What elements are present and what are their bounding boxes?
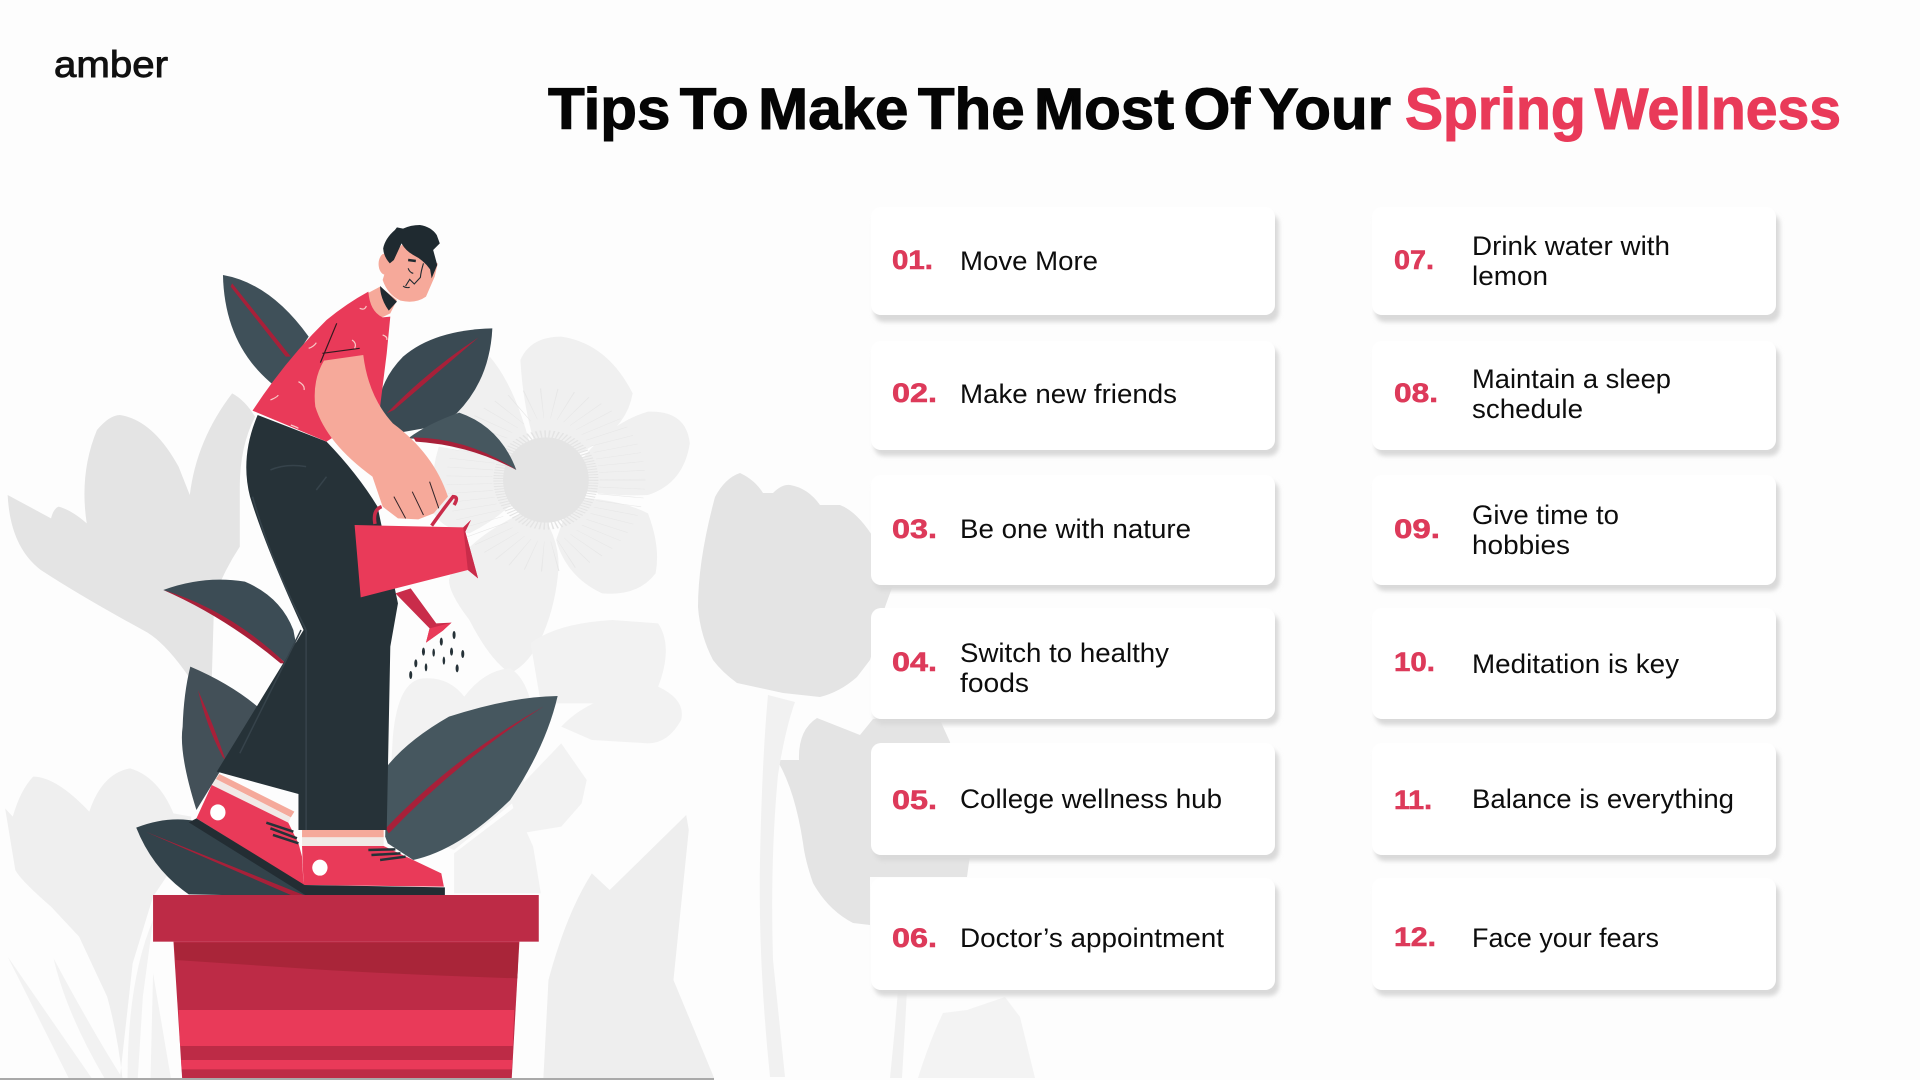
number 05: 05. xyxy=(892,785,937,815)
leaf: behind forearm xyxy=(408,413,516,470)
card 08 xyxy=(1372,341,1780,456)
background silhouette: flower rays xyxy=(469,403,622,557)
plant pot xyxy=(153,895,539,1078)
neck xyxy=(365,287,397,318)
card 11 xyxy=(1372,743,1780,861)
card 09 xyxy=(1372,475,1780,591)
label 01: Move More xyxy=(960,246,1098,276)
background silhouette: leaf right of pot xyxy=(543,815,714,1078)
card 01 xyxy=(871,207,1279,322)
label 09 xyxy=(1472,500,1619,560)
label 05: College wellness hub xyxy=(960,784,1222,814)
label 06: Doctor’s appointment xyxy=(960,923,1225,953)
label 07 xyxy=(1472,231,1670,291)
leaf: bottom left xyxy=(136,819,311,897)
ground line xyxy=(0,1078,714,1080)
background silhouettes: tulips and leaves right of pot xyxy=(698,473,1035,1078)
leaf: lower right xyxy=(385,696,558,860)
number 01: 01. xyxy=(892,245,933,275)
label 08: schedule xyxy=(1472,394,1583,424)
socks xyxy=(212,774,384,846)
label 03: Be one with nature xyxy=(960,514,1191,544)
shoes xyxy=(189,785,445,899)
leaf: upper right xyxy=(378,328,492,433)
label 04 xyxy=(960,638,1170,698)
leaf: lower left xyxy=(182,667,258,810)
leaf: mid left xyxy=(163,580,296,663)
logo: amber: amber xyxy=(54,44,168,85)
leaf: upper left xyxy=(223,275,309,387)
card 07 xyxy=(1372,207,1780,322)
label 07: lemon xyxy=(1472,261,1548,291)
number 10: 10. xyxy=(1394,647,1435,677)
card 10 xyxy=(1372,608,1780,725)
shirt xyxy=(253,292,390,442)
number 03: 03. xyxy=(892,514,937,544)
number 11: 11. xyxy=(1394,785,1432,815)
title xyxy=(548,77,1841,142)
number 09: 09. xyxy=(1394,514,1440,544)
label 04: foods xyxy=(960,668,1029,698)
number 12: 12. xyxy=(1394,922,1436,952)
watering can xyxy=(355,497,478,643)
card 05 xyxy=(871,743,1279,861)
label 08 xyxy=(1472,364,1671,424)
background silhouette: second flower xyxy=(388,620,682,893)
number 02: 02. xyxy=(892,378,937,408)
trousers xyxy=(217,415,398,830)
card 04 xyxy=(871,608,1279,725)
label 11: Balance is everything xyxy=(1472,784,1734,814)
label 07: Drink water with xyxy=(1472,231,1670,261)
label 10: Meditation is key xyxy=(1472,649,1680,679)
background silhouette: flower center xyxy=(499,434,593,526)
number 04: 04. xyxy=(892,647,937,677)
head xyxy=(379,225,440,311)
number 08: 08. xyxy=(1394,378,1438,408)
number 06: 06. xyxy=(892,923,937,953)
card 12 xyxy=(1372,878,1780,996)
number 07: 07. xyxy=(1394,245,1434,275)
card 02 xyxy=(871,341,1279,456)
label 08: Maintain a sleep xyxy=(1472,364,1671,394)
card 03 xyxy=(871,475,1279,591)
water drops xyxy=(409,631,464,679)
background silhouette: large flower xyxy=(423,337,690,673)
title highlight: Spring Wellness: Spring Wellness xyxy=(1405,77,1841,142)
illustration: person watering on a plant pot xyxy=(5,225,714,1078)
background silhouette: large left tulip xyxy=(8,393,255,680)
label 09: Give time to xyxy=(1472,500,1619,530)
background silhouette: lower left tulip and blades xyxy=(5,768,191,1078)
label 12: Face your fears xyxy=(1472,923,1659,953)
label 02: Make new friends xyxy=(960,379,1177,409)
label 09: hobbies xyxy=(1472,530,1570,560)
card 06 xyxy=(871,878,1279,996)
title: Tips To Make The Most Of Your xyxy=(548,77,1391,142)
arm and hand xyxy=(315,355,448,519)
label 04: Switch to healthy xyxy=(960,638,1170,668)
